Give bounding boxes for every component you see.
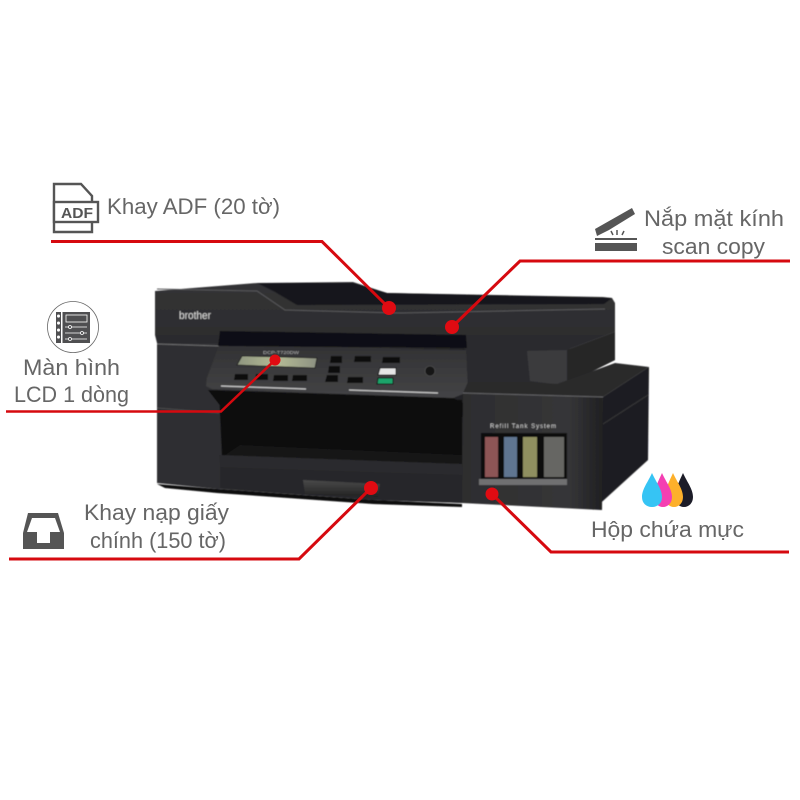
- shadow under printer: [157, 484, 462, 507]
- LCD screen: [237, 356, 317, 368]
- ink tank unit: [462, 363, 649, 510]
- paper output guides: [222, 445, 462, 466]
- panel lower highlights: [221, 386, 438, 393]
- label line two: LCD 1 dòng: [14, 382, 129, 407]
- blue ink: [504, 437, 517, 477]
- tank front top highlight: [463, 393, 603, 397]
- tray handle: [303, 480, 380, 497]
- colour start button: [377, 378, 393, 384]
- scanner right side block: [527, 332, 615, 384]
- lid highlight line: [157, 289, 605, 313]
- printer main body: [157, 340, 467, 503]
- tank front: [462, 393, 603, 510]
- leader line: [51, 242, 389, 308]
- control panel: [206, 346, 468, 398]
- paper tray strip: [219, 455, 462, 475]
- red ink: [485, 437, 498, 477]
- window sill: [479, 479, 567, 485]
- label line one: Nắp mặt kính: [644, 206, 784, 231]
- icon: ADF document: [54, 184, 98, 232]
- marker dot: [486, 488, 498, 500]
- callout: Khay nạp giấy: [9, 481, 378, 559]
- function buttons: [234, 374, 307, 381]
- black ink: [544, 437, 564, 477]
- ADF top surface: [257, 283, 612, 305]
- yellow ink: [523, 437, 537, 477]
- mono start button: [378, 368, 396, 375]
- main paper tray front: [220, 467, 462, 503]
- icon: scanner lid: [595, 208, 637, 251]
- left body seam: [157, 408, 219, 413]
- printer photo: [155, 282, 649, 510]
- marker dot: [270, 354, 280, 366]
- label line two: scan copy: [662, 234, 765, 259]
- marker dot: [382, 301, 396, 315]
- leader line: [9, 488, 371, 559]
- icon: paper tray: [23, 513, 64, 549]
- callout: Khay ADF: [51, 184, 396, 315]
- label: Khay ADF (20 tờ): [107, 194, 280, 219]
- power button: [425, 366, 435, 376]
- rear block beside panel: [465, 340, 570, 386]
- tank side seam: [603, 395, 648, 424]
- leader line: [452, 261, 790, 327]
- label line one: Màn hình: [23, 355, 120, 380]
- label line two: chính (150 tờ): [90, 528, 226, 553]
- icon: LCD settings: [48, 302, 98, 352]
- lid lower edge highlight: [157, 344, 220, 346]
- slot under scanner: [218, 331, 467, 348]
- shadow under panel: [208, 390, 467, 418]
- panel face: [206, 346, 468, 398]
- leader line: [6, 360, 275, 412]
- label: Hộp chứa mực: [591, 517, 744, 542]
- callout: Hộp chứa mực: [486, 473, 789, 552]
- scanner lid with ADF cover: [155, 282, 615, 350]
- scanner right corner shade: [567, 332, 615, 384]
- tank window: [481, 433, 567, 480]
- paper output cavity: [219, 392, 462, 466]
- marker dot: [364, 481, 378, 495]
- brother logo: brother: [179, 310, 211, 322]
- label line one: Khay nạp giấy: [84, 500, 229, 525]
- leader line: [492, 494, 789, 552]
- tank side: [593, 367, 649, 510]
- navigation buttons: [325, 356, 342, 382]
- marker dot: [445, 320, 459, 334]
- model label: DCP-T720DW: [263, 350, 300, 355]
- icon: ink drops: [642, 473, 693, 507]
- tank top surface: [463, 363, 649, 397]
- callout: Nắp mặt kính: [445, 206, 790, 334]
- tank label: Refill Tank System: [490, 424, 556, 430]
- icon: ADF document: ADF: [61, 206, 93, 222]
- menu buttons: [347, 356, 400, 383]
- callout: Màn hình LCD: [6, 302, 280, 412]
